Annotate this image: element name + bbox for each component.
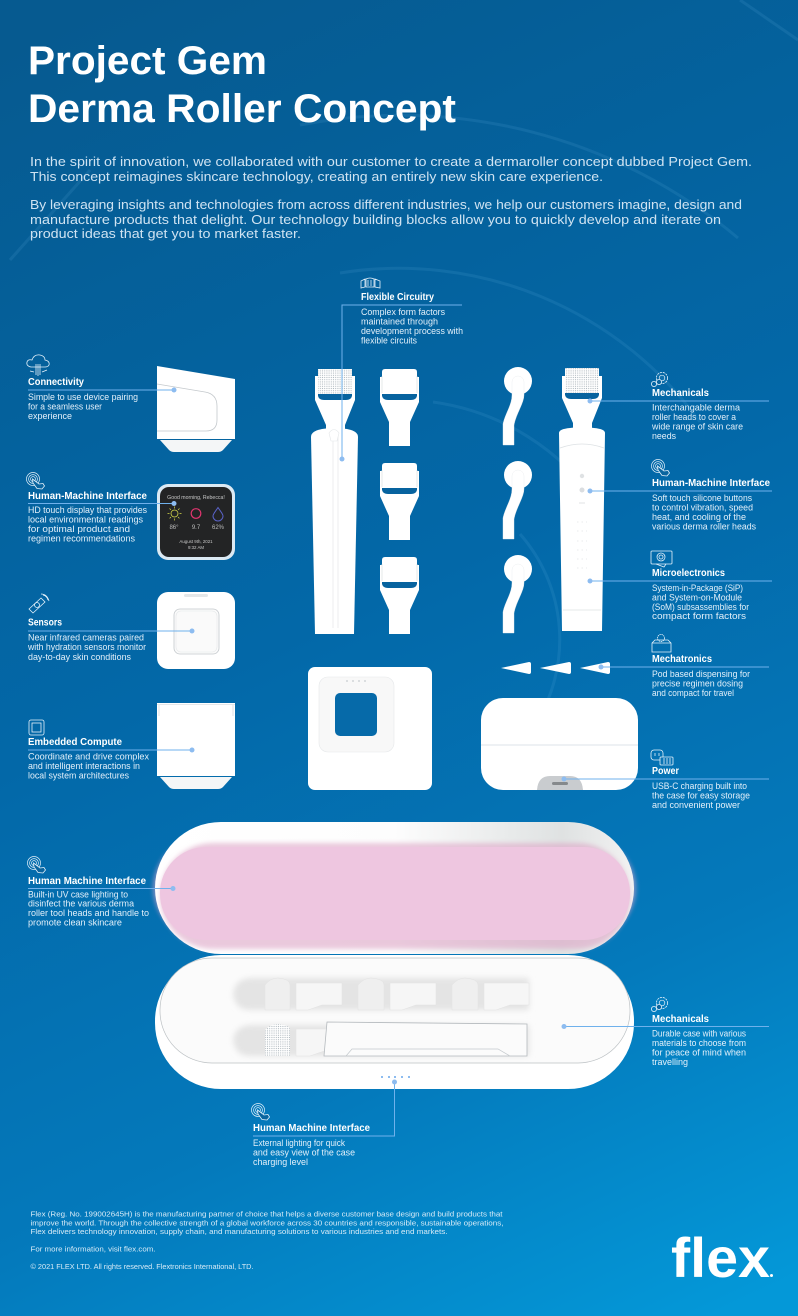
intro text bbox=[30, 155, 752, 241]
callout: microelectronics bbox=[588, 551, 772, 621]
product: pods bbox=[501, 662, 610, 674]
callout: sensors bbox=[27, 594, 194, 662]
intro text: manufacture products that delight. Our technology building blocks allow you to quickly develop and iterate on bbox=[30, 213, 721, 227]
callout: microelectronics: System-in-Package (SiP) bbox=[652, 583, 743, 593]
footer text: © 2021 FLEX LTD. All rights reserved. Flextronics International, LTD. bbox=[30, 1262, 254, 1271]
product: open case base bbox=[155, 955, 634, 1089]
product: charging base bbox=[308, 667, 432, 790]
product: touch display: Good morning, Rebecca! bbox=[167, 495, 225, 501]
callout: human-machine interface, display: local environmental readings bbox=[28, 514, 144, 524]
callout: power bbox=[562, 750, 769, 810]
flex logo: flex bbox=[671, 1226, 770, 1289]
icon: flexible circuit bbox=[361, 278, 380, 288]
callout: mechanicals, heads: Interchangable derma bbox=[652, 402, 740, 412]
callout: connectivity: Connectivity bbox=[28, 377, 85, 388]
callout: human machine interface, UV lid: promote clean skincare bbox=[28, 918, 122, 928]
callout: mechanicals, case: Mechanicals bbox=[652, 1014, 710, 1025]
callout: human machine interface, UV lid bbox=[28, 856, 176, 928]
callout: mechatronics: precise regimen dosing bbox=[652, 678, 743, 688]
product: roller front bbox=[559, 368, 605, 631]
callout: embedded compute: Coordinate and drive complex bbox=[28, 752, 150, 762]
callout: mechatronics: Mechatronics bbox=[652, 654, 713, 665]
icon: package bbox=[651, 551, 672, 567]
product: pod case bbox=[481, 698, 638, 790]
callout: flexible circuitry bbox=[340, 278, 463, 462]
callout: power: the case for easy storage bbox=[652, 790, 750, 800]
footer text: Flex delivers technology innovation, supply chain, and manufacturing solutions to various industries and end markets. bbox=[30, 1227, 448, 1236]
icon: box with gear bbox=[652, 634, 671, 652]
callout: connectivity: for a seamless user bbox=[28, 402, 102, 412]
callout: mechanicals, case: travelling bbox=[652, 1057, 688, 1067]
product: touch display: 9.7 bbox=[192, 525, 201, 531]
callout: human-machine interface, display: Human-Machine Interface bbox=[28, 491, 148, 502]
callout: embedded compute bbox=[28, 720, 194, 780]
product: connectivity module bbox=[157, 366, 235, 452]
icon: sensor bbox=[29, 594, 49, 613]
intro text: product ideas that get you to market faster. bbox=[30, 227, 301, 241]
callout: human-machine interface, buttons: heat, and cooling of the bbox=[652, 512, 746, 522]
callout: mechatronics: and compact for travel bbox=[652, 688, 734, 698]
callout: flexible circuitry: development process with bbox=[361, 326, 463, 336]
callout: mechanicals, case: materials to choose from bbox=[652, 1038, 746, 1048]
callout: connectivity bbox=[27, 355, 177, 421]
tray: top row of heads bbox=[233, 978, 529, 1010]
callout: mechatronics: Pod based dispensing for bbox=[652, 669, 750, 679]
callout: connectivity: Simple to use device pairing bbox=[28, 392, 138, 402]
callout: human-machine interface, buttons: to control vibration, speed bbox=[652, 502, 753, 512]
callout: mechanicals, heads: needs bbox=[652, 431, 677, 441]
product: roller head fronts bbox=[380, 369, 419, 634]
icon: chip bbox=[29, 720, 44, 735]
product: touch display: 62% bbox=[212, 525, 225, 531]
callout: mechanicals, case bbox=[562, 997, 769, 1067]
callout: human-machine interface, buttons: Human-Machine Interface bbox=[652, 478, 771, 489]
footer text bbox=[30, 1210, 504, 1271]
intro text: By leveraging insights and technologies from across different industries, we help our customers imagine, design and bbox=[30, 198, 742, 212]
callout: human machine interface, charge lights: and easy view of the case bbox=[253, 1148, 355, 1158]
footer text: Flex (Reg. No. 199002645H) is the manufacturing partner of choice that helps a diverse customer base design and build products that bbox=[30, 1210, 502, 1218]
callout: embedded compute: and intelligent interactions in bbox=[28, 761, 140, 771]
callout: human-machine interface, buttons: various derma roller heads bbox=[652, 522, 757, 532]
callout: human machine interface, UV lid: disinfect the various derma bbox=[28, 898, 134, 908]
title: Project Gem bbox=[28, 39, 267, 83]
callout: microelectronics: Microelectronics bbox=[652, 568, 726, 579]
product: open case lid bbox=[153, 822, 636, 954]
callout: sensors: Near infrared cameras paired bbox=[28, 632, 144, 642]
callout: human machine interface, charge lights: Human Machine Interface bbox=[253, 1123, 371, 1134]
callout: human-machine interface, buttons bbox=[588, 460, 772, 532]
callout: embedded compute: Embedded Compute bbox=[28, 737, 123, 748]
icon: cloud bbox=[27, 355, 49, 376]
callout: sensors: with hydration sensors monitor bbox=[27, 642, 146, 652]
callout: power: and convenient power bbox=[652, 800, 740, 810]
icon: plug and battery bbox=[651, 750, 673, 765]
icon: gears bbox=[651, 997, 668, 1012]
callout: human machine interface, UV lid: Human Machine Interface bbox=[28, 876, 147, 887]
callout: flexible circuitry: Complex form factors bbox=[361, 307, 446, 317]
callout: mechatronics bbox=[598, 634, 769, 698]
title bbox=[28, 39, 456, 131]
callout: microelectronics: and System-on-Module bbox=[652, 592, 742, 602]
callout: embedded compute: local system architectures bbox=[28, 770, 130, 780]
callout: human-machine interface, display: regimen recommendations bbox=[28, 534, 136, 544]
callout: microelectronics: (SoM) subsassemblies for bbox=[652, 602, 749, 612]
callout: human-machine interface, buttons: Soft touch silicone buttons bbox=[652, 493, 753, 503]
callout: human-machine interface, display bbox=[26, 472, 176, 544]
callout: flexible circuitry: flexible circuits bbox=[361, 336, 418, 346]
callout: flexible circuitry: Flexible Circuitry bbox=[361, 292, 434, 303]
intro text: In the spirit of innovation, we collaborated with our customer to create a dermaroller concept dubbed Project Gem. bbox=[30, 155, 752, 169]
callout: power: USB-C charging built into bbox=[652, 781, 747, 791]
callout: human machine interface, charge lights: External lighting for quick bbox=[253, 1138, 346, 1148]
product: roller with flexible circuit view bbox=[311, 369, 358, 634]
callout: mechanicals, case: Durable case with various bbox=[652, 1028, 747, 1038]
product: touch display: 86° bbox=[169, 525, 179, 531]
callout: sensors: Sensors bbox=[28, 618, 62, 628]
callout: mechanicals, heads: wide range of skin care bbox=[651, 422, 743, 432]
callout: human machine interface, UV lid: Built-in UV case lighting to bbox=[28, 890, 128, 900]
callout: connectivity: experience bbox=[28, 411, 72, 421]
callout: mechanicals, case: for peace of mind when bbox=[652, 1048, 746, 1058]
product: touch display: August 9th, 2021 bbox=[179, 539, 213, 544]
icon: touch bbox=[652, 460, 670, 476]
callout: human-machine interface, display: HD touch display that provides bbox=[28, 505, 148, 515]
intro text: This concept reimagines skincare technology, creating an entirely new skin care experience. bbox=[30, 170, 603, 184]
callout: mechanicals, heads: Mechanicals bbox=[652, 388, 710, 399]
callout: human-machine interface, display: for optimal product and bbox=[28, 524, 130, 534]
callout: mechanicals, heads bbox=[588, 372, 769, 441]
footer text: For more information, visit flex.com. bbox=[30, 1244, 156, 1254]
product: sensor module bbox=[157, 592, 235, 669]
callout: mechanicals, heads: roller heads to cover a bbox=[652, 412, 736, 422]
product: roller head sides bbox=[503, 367, 532, 633]
icon: touch bbox=[252, 1104, 270, 1120]
callout: power: Power bbox=[652, 766, 679, 777]
callout: human machine interface, charge lights bbox=[252, 1080, 397, 1167]
callout: human machine interface, UV lid: roller tool heads and handle to bbox=[28, 908, 149, 918]
callout: flexible circuitry: maintained through bbox=[361, 316, 438, 326]
product: touch display bbox=[157, 484, 235, 560]
callout: sensors: day-to-day skin conditions bbox=[28, 652, 132, 662]
footer text: improve the world. Through the collective strength of a global workforce across 30 countries and responsible, sustainable operations, bbox=[30, 1218, 504, 1228]
callout: microelectronics: compact form factors bbox=[652, 611, 747, 621]
callout: human machine interface, charge lights: charging level bbox=[253, 1157, 308, 1167]
product: embedded compute module bbox=[157, 703, 235, 789]
title: Derma Roller Concept bbox=[28, 87, 456, 131]
tray: roller handle bbox=[233, 1022, 529, 1056]
product: touch display: 9:32 AM bbox=[188, 545, 204, 550]
icon: touch bbox=[26, 472, 44, 489]
icon: touch bbox=[28, 856, 46, 873]
icon: gears bbox=[651, 372, 668, 387]
